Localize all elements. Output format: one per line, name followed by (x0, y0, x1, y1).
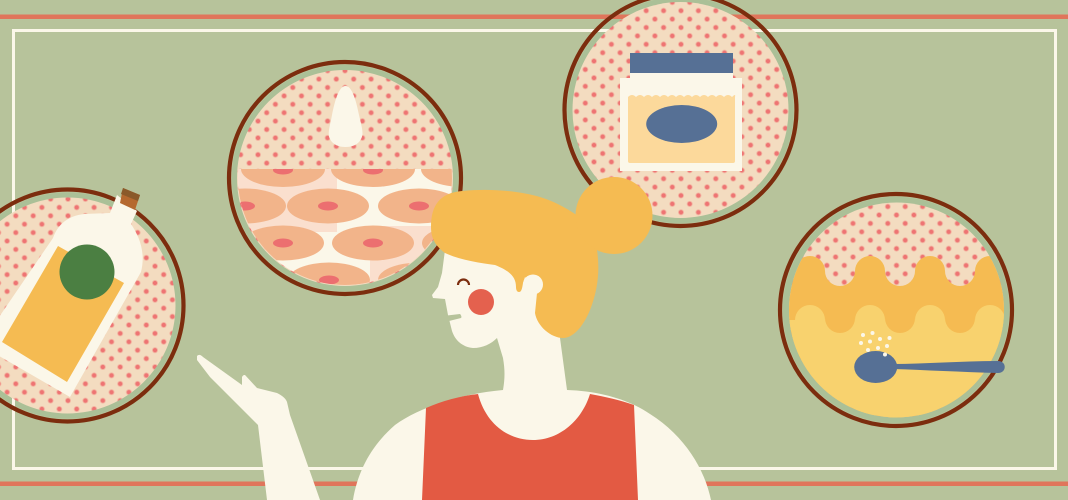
figure: woman (197, 177, 711, 500)
cheek (468, 289, 494, 315)
mouth (447, 314, 461, 321)
jar lid (630, 53, 733, 73)
panel: oil bottle circle (0, 188, 184, 422)
eye (458, 280, 469, 285)
jar label (628, 95, 735, 163)
ear (523, 274, 543, 294)
hair (431, 190, 598, 338)
circle halo rings (0, 0, 1006, 420)
icon: oil bottle (0, 188, 143, 397)
panel: cream and skin circle (226, 60, 464, 296)
honey layers (789, 256, 1004, 418)
jar oval (646, 105, 717, 143)
salt grains (859, 331, 892, 356)
face (432, 250, 560, 348)
arm and hand (197, 355, 320, 500)
panel: honey and spoon circle (780, 194, 1020, 430)
skin cross-section (238, 169, 452, 285)
icon: spoon (854, 351, 1005, 383)
icon: cream drop (329, 86, 362, 147)
hair bun (576, 177, 652, 254)
body (353, 338, 711, 500)
red top (422, 394, 638, 500)
panel: jar circle (564, 0, 796, 226)
icon: jar (620, 53, 742, 171)
